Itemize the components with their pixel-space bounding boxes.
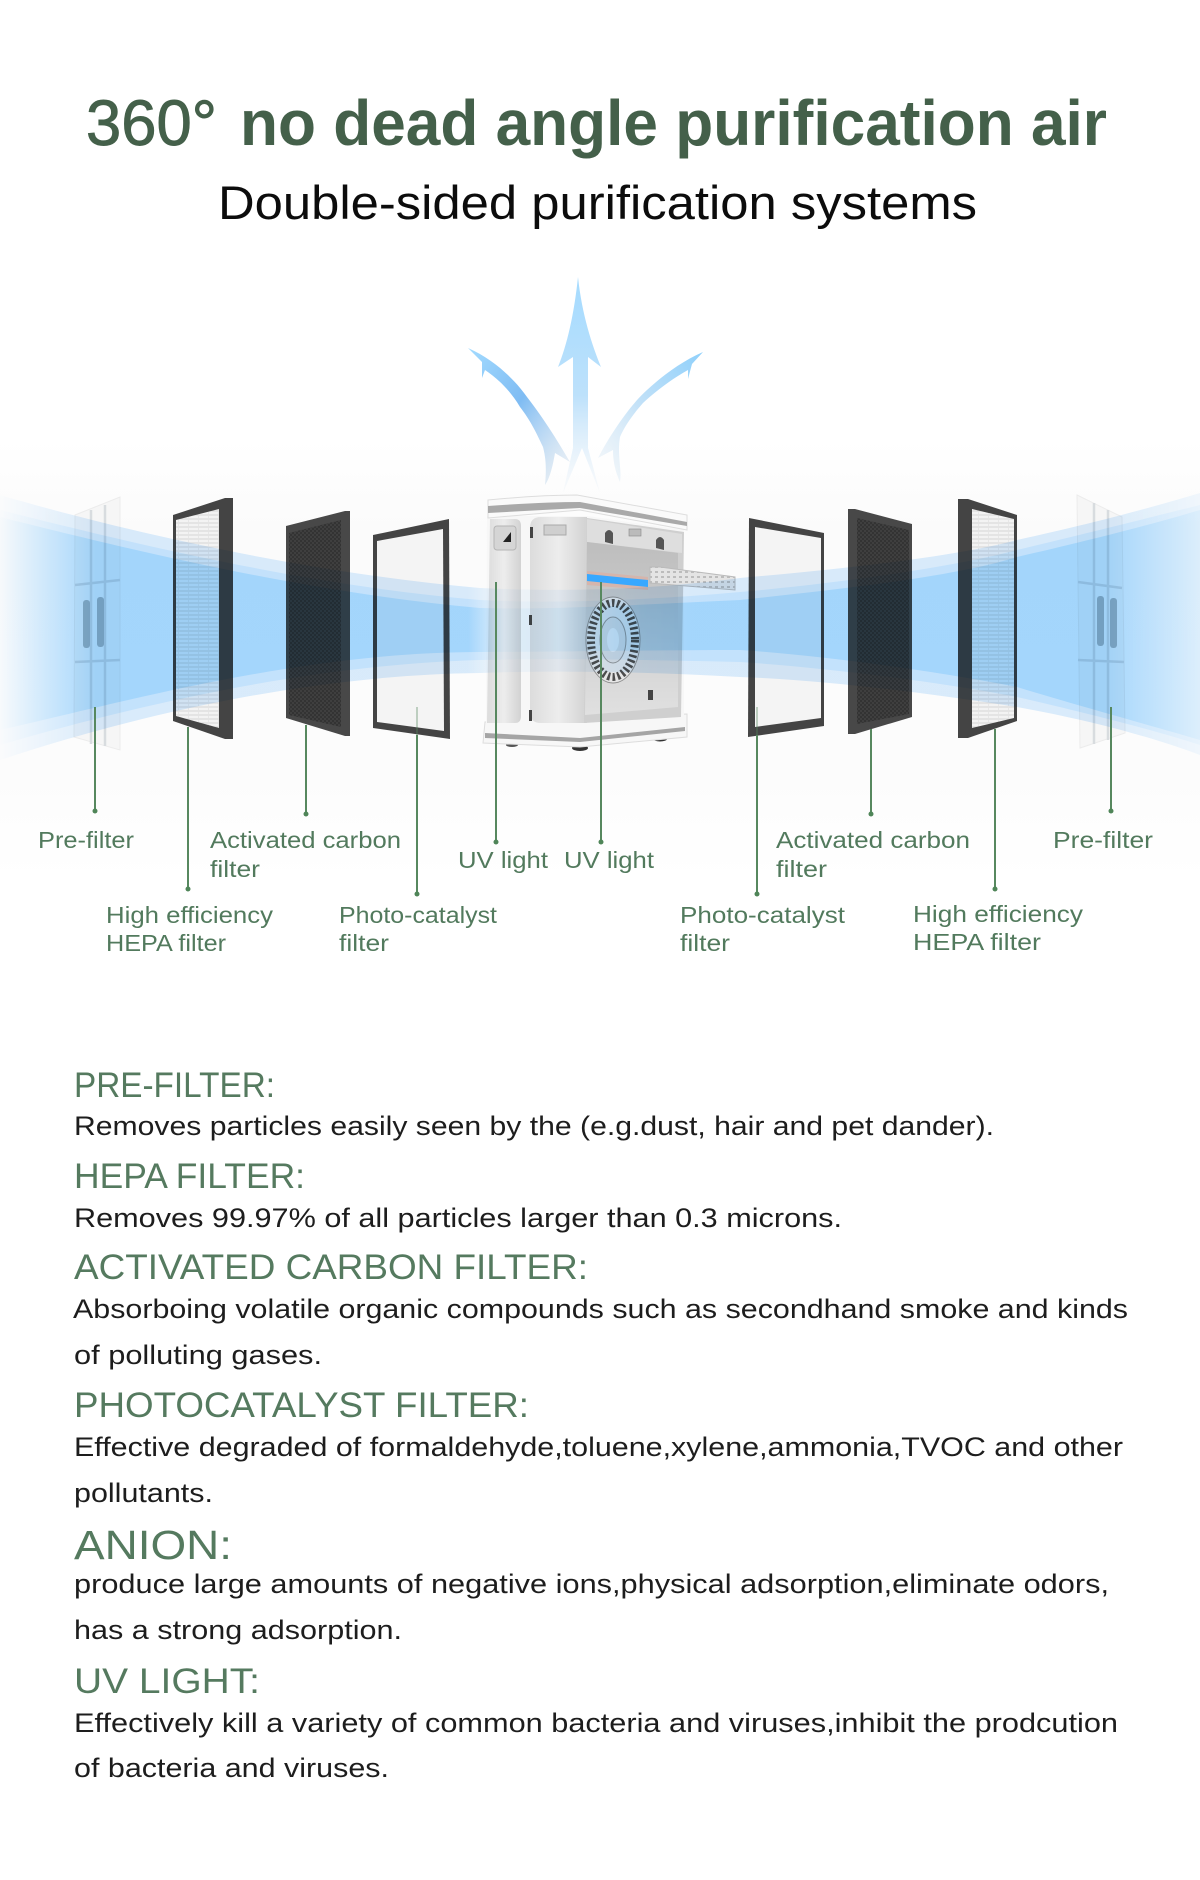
label: high efficiency HEPA left: HEPA filter (106, 930, 226, 956)
label: activated carbon left (210, 827, 401, 882)
label: activated carbon right: Activated carbon (776, 827, 970, 853)
text block: photocatalyst filter (74, 1386, 1123, 1508)
text block: HEPA filter: Removes 99.97% of all particles larger than 0.3 microns. (74, 1203, 842, 1233)
text block: UV light: of bacteria and viruses. (74, 1753, 389, 1783)
arrow: centre airflow (558, 277, 601, 493)
label: activated carbon right (776, 827, 970, 882)
text block: HEPA filter (74, 1157, 842, 1233)
text block: activated carbon filter: of polluting gases. (74, 1340, 322, 1370)
subtitle: Double-sided purification systems (218, 176, 977, 229)
filter: left HEPA (173, 498, 233, 739)
text block: anion (74, 1522, 1109, 1645)
label: activated carbon left: Activated carbon (210, 827, 401, 853)
filter: right HEPA (958, 499, 1017, 738)
text block: photocatalyst filter: pollutants. (74, 1478, 213, 1508)
label: high efficiency HEPA left: High efficiency (106, 902, 274, 928)
text block: photocatalyst filter: Effective degraded of formaldehyde,toluene,xylene,ammonia,TVOC and other (74, 1432, 1123, 1462)
arrow: left airflow (468, 348, 570, 485)
arrow: right airflow (598, 352, 703, 482)
text block: activated carbon filter (73, 1248, 1128, 1370)
filter: right activated carbon (848, 509, 912, 734)
label: photo-catalyst right: Photo-catalyst (680, 902, 846, 928)
text block: HEPA filter: HEPA FILTER: (74, 1157, 305, 1196)
label: photo-catalyst right (680, 902, 846, 956)
filter: right pre-filter (1077, 495, 1125, 748)
purifier unit (483, 495, 735, 751)
text block: photocatalyst filter: PHOTOCATALYST FILTER: (74, 1386, 529, 1425)
background haze behind product (0, 440, 1200, 880)
text block: anion: produce large amounts of negative ions,physical adsorption,eliminate odors, (74, 1569, 1109, 1599)
text block: anion: ANION: (74, 1522, 232, 1568)
label: pre-filter left: Pre-filter (38, 827, 134, 853)
leader lines (95, 582, 1111, 894)
label: activated carbon left: filter (210, 856, 260, 882)
label: photo-catalyst left (339, 902, 498, 956)
label: photo-catalyst left: filter (339, 930, 389, 956)
leader dots (92, 808, 1114, 896)
text block: UV light: UV LIGHT: (74, 1662, 260, 1701)
filter: left photo-catalyst (373, 519, 450, 739)
product diagram: exploded filters and unit (0, 493, 1200, 760)
filter: left activated carbon (286, 511, 350, 736)
label: activated carbon right: filter (776, 856, 827, 882)
text block: pre-filter: PRE-FILTER: (74, 1066, 275, 1105)
text block: activated carbon filter: Absorboing volatile organic compounds such as secondhand smoke and kinds (73, 1294, 1128, 1324)
filter: left pre-filter (74, 497, 120, 750)
label: high efficiency HEPA right: HEPA filter (913, 929, 1041, 955)
title: no dead angle purification air (240, 87, 1107, 159)
airflow bands (0, 493, 1200, 760)
label: photo-catalyst right: filter (680, 930, 730, 956)
title: 360° (86, 87, 217, 159)
filter: right photo-catalyst (748, 518, 824, 737)
label: high efficiency HEPA right (913, 901, 1084, 955)
label: UV light one: UV light (458, 847, 549, 873)
label: UV light two: UV light (564, 847, 655, 873)
label: pre-filter right: Pre-filter (1053, 827, 1153, 853)
text block: activated carbon filter: ACTIVATED CARBON FILTER: (74, 1248, 588, 1287)
text block: pre-filter (74, 1066, 994, 1141)
label: photo-catalyst left: Photo-catalyst (339, 902, 498, 928)
text block: anion: has a strong adsorption. (74, 1615, 402, 1645)
label: high efficiency HEPA left (106, 902, 274, 956)
text block: UV light: Effectively kill a variety of common bacteria and viruses,inhibit the prodcution (74, 1708, 1118, 1738)
label: high efficiency HEPA right: High efficiency (913, 901, 1084, 927)
text block: pre-filter: Removes particles easily seen by the (e.g.dust, hair and pet dander). (74, 1111, 994, 1141)
text block: UV light (74, 1662, 1118, 1783)
